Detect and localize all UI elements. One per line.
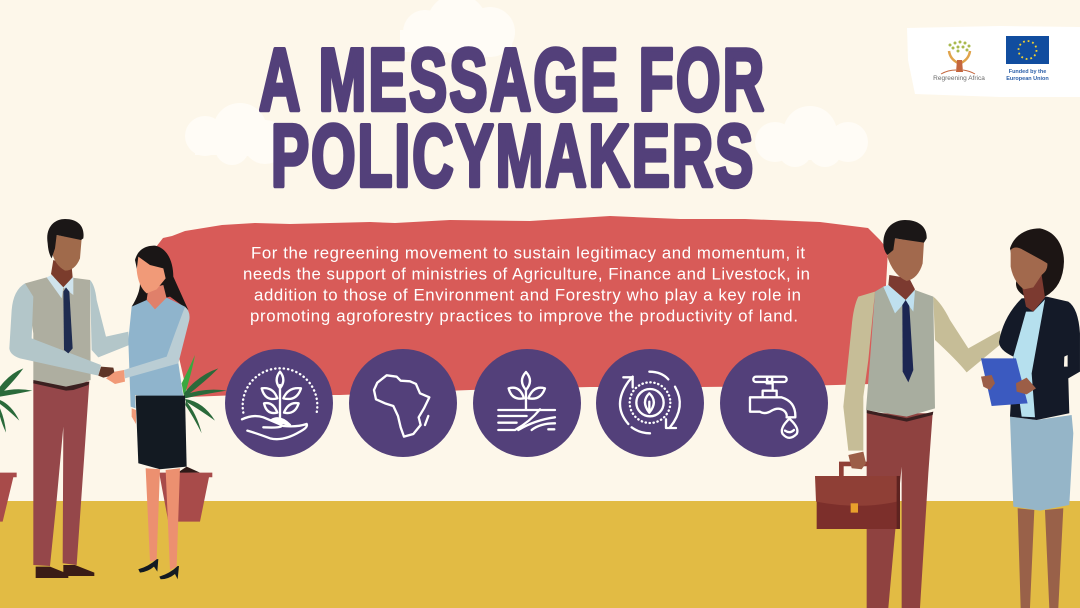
icon row	[225, 349, 828, 457]
message text: addition to those of Environment and Forestry who play a key role in	[254, 286, 801, 304]
icon: hand holding seedling	[225, 349, 333, 457]
logo: EU flag	[1006, 36, 1049, 82]
red brush panel	[156, 216, 888, 397]
logo panel	[907, 26, 1080, 97]
logo: Regreening Africa	[933, 40, 985, 82]
figure: woman shaking hands	[106, 246, 190, 579]
message text: For the regreening movement to sustain legitimacy and momentum, it	[251, 244, 805, 262]
figure: woman with tablet	[981, 228, 1080, 608]
briefcase	[815, 464, 900, 529]
logo: EU flag: European Union	[1006, 76, 1049, 82]
title: POLICYMAKERS	[271, 106, 753, 205]
logo: EU flag: Funded by the	[1009, 69, 1046, 75]
icon: Africa map	[349, 349, 457, 457]
message text: promoting agroforestry practices to improve the productivity of land.	[250, 306, 798, 326]
plant left	[0, 368, 32, 522]
figure: man with briefcase	[815, 220, 1002, 608]
logo: Regreening Africa: Regreening Africa	[933, 75, 985, 82]
icon: leaf recycling cycle	[596, 349, 704, 457]
message text	[243, 244, 810, 326]
message text: needs the support of ministries of Agriculture, Finance and Livestock, in	[243, 264, 810, 284]
ground band	[0, 501, 1080, 608]
title: A MESSAGE FOR	[259, 30, 764, 129]
figure: man shaking hands	[9, 219, 129, 578]
plant right	[159, 355, 227, 522]
clouds behind title	[185, 0, 868, 167]
title	[259, 30, 764, 205]
icon: water tap with drop	[720, 349, 828, 457]
icon: seedling on field	[473, 349, 581, 457]
